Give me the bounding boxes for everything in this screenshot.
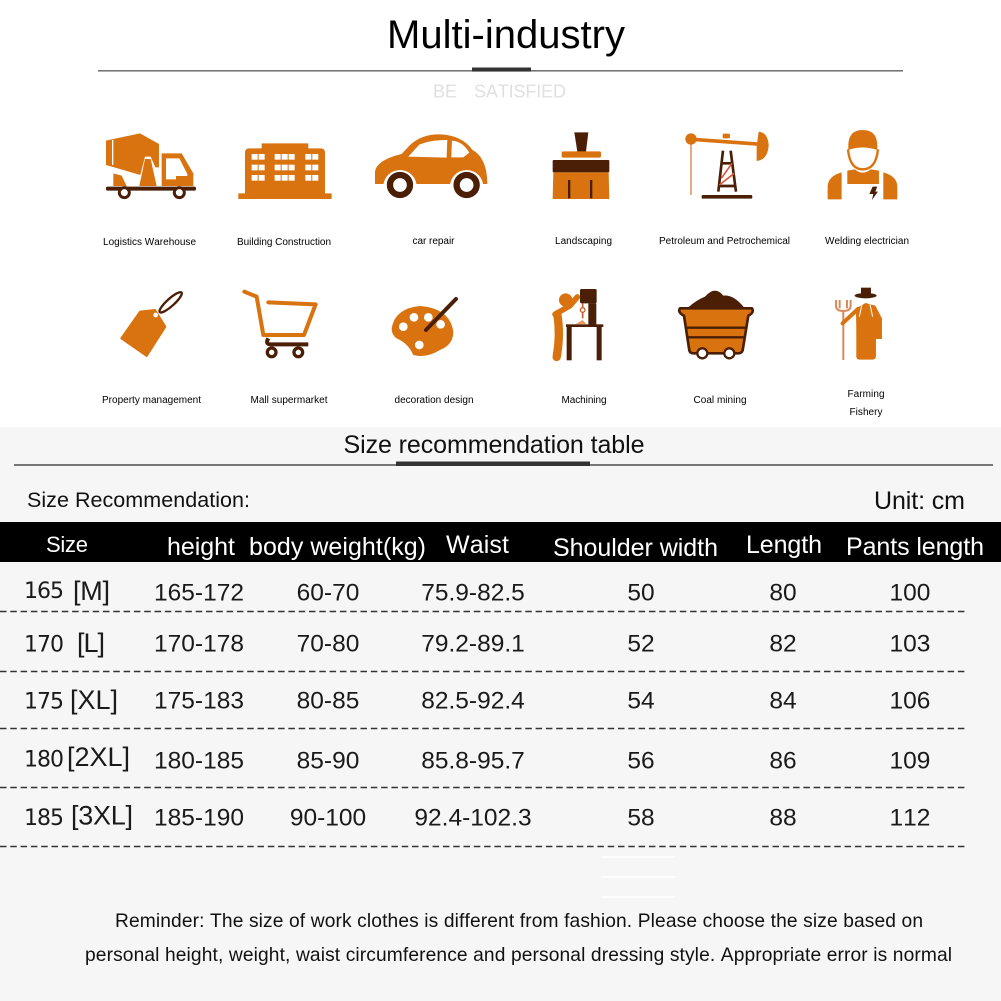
table row L: 103 — [890, 630, 930, 658]
table row 3XL: 185 — [24, 806, 64, 831]
table header — [0, 522, 1001, 562]
reminder note: personal height, weight, waist circumference and personal dressing style. Appropriate error is normal — [85, 945, 952, 966]
industry labels row 1: Petroleum and Petrochemical — [659, 236, 790, 247]
table row XL: 80-85 — [297, 688, 359, 714]
table row 3XL: 58 — [627, 804, 655, 832]
icon: building — [238, 143, 332, 199]
table row 2XL: 180-185 — [154, 748, 244, 774]
table row XL: 175-183 — [154, 688, 244, 714]
table row 3XL: 90-100 — [290, 804, 366, 832]
industry labels row 2: Machining — [562, 395, 606, 406]
icon: paint palette — [392, 299, 456, 356]
table row XL: 54 — [627, 688, 655, 714]
industry labels row 2: decoration design — [394, 395, 474, 406]
table row 2XL: 109 — [890, 748, 930, 774]
reminder note: Reminder: The size of work clothes is different from fashion. Please choose the size based on — [115, 911, 923, 932]
table row L: 82 — [769, 630, 797, 658]
table row L: 52 — [627, 630, 655, 658]
table row 3XL — [24, 800, 930, 832]
icon: tag — [121, 290, 184, 356]
table row 2XL: 86 — [769, 748, 797, 774]
table header: body weight(kg) — [249, 533, 426, 561]
table row 2XL: 180 — [24, 748, 64, 772]
industry labels row 2: Coal mining — [694, 395, 746, 406]
section heading: size table: Size recommendation table — [344, 431, 644, 459]
table row 2XL: 85-90 — [297, 748, 359, 774]
table header: Waist — [446, 531, 509, 559]
table header: Pants length — [846, 533, 984, 561]
industry labels row 1: car repair — [412, 236, 455, 247]
icon: shopping cart — [244, 292, 316, 357]
table row 3XL: 112 — [890, 804, 930, 832]
table row 3XL: 185-190 — [154, 804, 244, 832]
table row M: 100 — [890, 580, 930, 606]
unit label: Unit: cm — [874, 487, 965, 515]
subtitle — [433, 82, 566, 102]
icon: machinist — [555, 289, 603, 360]
icon: electrician — [828, 130, 897, 200]
size recommendation label: Size Recommendation: — [27, 488, 250, 512]
icon: coal cart — [679, 291, 753, 358]
table header: Length — [746, 531, 822, 559]
table row M: 80 — [769, 580, 797, 606]
table row L: 79.2-89.1 — [421, 630, 525, 658]
table row XL: 82.5-92.4 — [421, 688, 525, 714]
table row M: 165 — [24, 579, 64, 604]
table header: Size — [46, 532, 88, 557]
industry labels row 1: Welding electrician — [825, 236, 909, 247]
table row XL: 106 — [890, 688, 930, 714]
table row M: 60-70 — [297, 580, 359, 606]
table row M — [24, 576, 930, 606]
table row 3XL: 88 — [769, 804, 797, 832]
subtitle: BE — [433, 82, 457, 102]
industry labels row 1: Landscaping — [555, 236, 612, 247]
table row L: 170-178 — [154, 630, 244, 658]
table row L — [24, 628, 930, 658]
table row XL — [24, 685, 930, 715]
industry labels row 2 — [102, 389, 884, 418]
icon: oil pump — [685, 132, 769, 199]
table row M: [M] — [73, 576, 110, 606]
industry labels row 2: Fishery — [850, 407, 882, 418]
industry labels row 2: Mall supermarket — [250, 395, 328, 406]
table row L: [L] — [77, 628, 105, 658]
icon: car — [373, 134, 490, 203]
table row 3XL: [3XL] — [71, 800, 133, 830]
table row M: 165-172 — [154, 580, 244, 606]
table row L: 170 — [24, 632, 64, 658]
table row 2XL: 85.8-95.7 — [421, 748, 525, 774]
subtitle: SATISFIED — [474, 82, 566, 102]
table row XL: 175 — [24, 690, 64, 714]
table header: Shoulder width — [553, 534, 718, 562]
icon: brush — [553, 132, 609, 199]
table header: height — [167, 533, 235, 561]
table row XL: 84 — [769, 688, 797, 714]
icon: farmer — [836, 288, 882, 360]
table row 2XL: [2XL] — [67, 742, 130, 772]
table row M: 50 — [627, 580, 655, 606]
industry labels row 1: Building Construction — [237, 237, 331, 248]
title — [98, 13, 903, 72]
industry labels row 1: Logistics Warehouse — [103, 237, 196, 248]
table row 2XL: 56 — [627, 748, 655, 774]
table row XL: [XL] — [70, 685, 118, 715]
industry labels row 2: Property management — [102, 395, 201, 406]
title: Multi-industry — [387, 13, 625, 57]
industry labels row 1 — [103, 236, 909, 248]
table row 2XL — [24, 742, 930, 774]
table row 3XL: 92.4-102.3 — [414, 804, 532, 832]
table row L: 70-80 — [297, 630, 359, 658]
section heading: size table — [14, 431, 993, 466]
icon: logistics truck — [106, 133, 196, 198]
reminder note — [85, 911, 952, 966]
table row M: 75.9-82.5 — [421, 580, 525, 606]
industry labels row 2: Farming — [848, 389, 884, 400]
